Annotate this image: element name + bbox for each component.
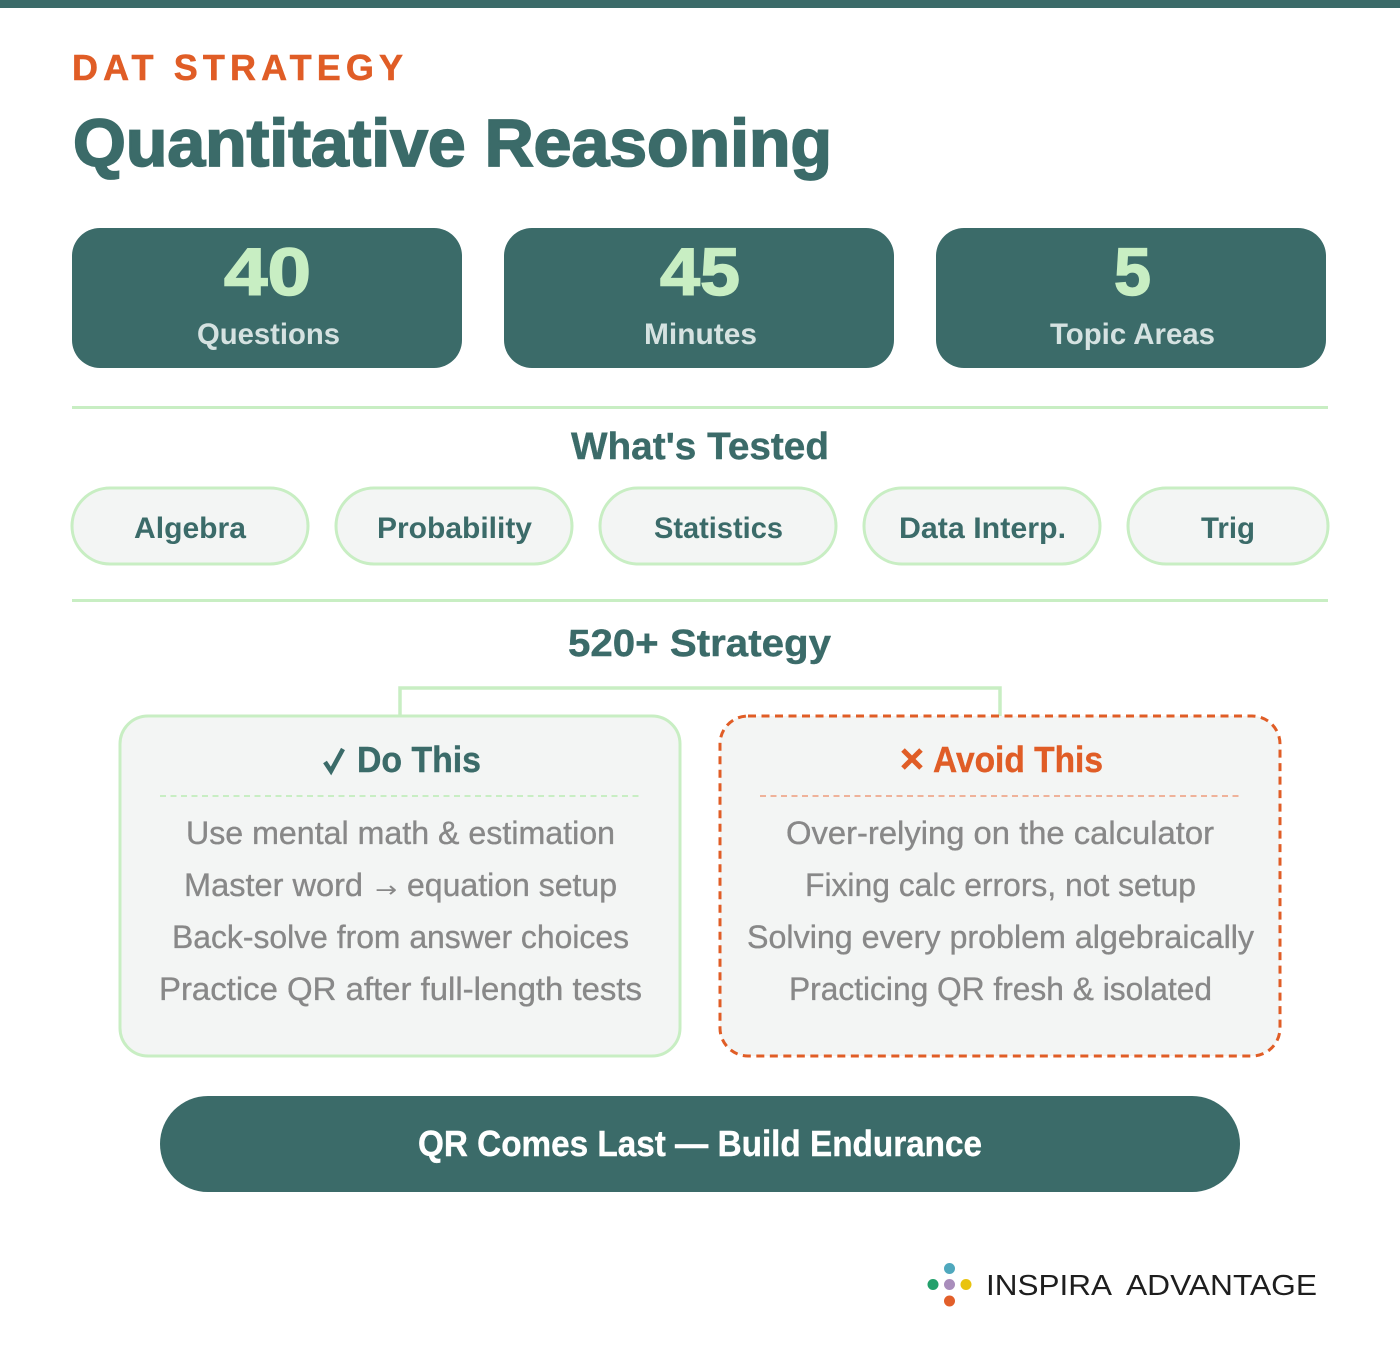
connector between strategy heading and panels: [400, 688, 1000, 716]
do this list: Practice QR after full-length tests: [159, 971, 642, 1007]
avoid this list: Fixing calc errors, not setup: [805, 867, 1196, 903]
pill: algebra: Algebra: [134, 512, 246, 545]
pill: statistics: [600, 488, 836, 564]
icon: check mark: [325, 749, 343, 771]
logo: inspira advantage: ADVANTAGE: [1126, 1270, 1317, 1302]
top accent bar: [0, 0, 1400, 8]
stat: 45 minutes: Minutes: [644, 318, 757, 351]
do this list: Master word: [184, 867, 363, 903]
stat: 40 questions: 40: [224, 235, 311, 310]
section heading: 520+ strategy: 520+ Strategy: [568, 623, 831, 665]
stat: 40 questions: Questions: [197, 318, 340, 351]
avoid this list: Practicing QR fresh & isolated: [789, 971, 1212, 1007]
avoid this list: Over-relying on the calculator: [786, 815, 1214, 851]
stat: 5 topic areas: Topic Areas: [1050, 318, 1215, 351]
do this list: →: [375, 878, 397, 903]
eyebrow heading: DAT STRATEGY: [72, 47, 403, 88]
stat cards: [72, 228, 1326, 368]
stat: 5 topic areas: 5: [1114, 235, 1151, 310]
panel: do this: [120, 716, 680, 1056]
pill: probability: Probability: [377, 512, 532, 545]
icon: logo dots: [928, 1263, 972, 1306]
icon: cross mark: [903, 750, 921, 768]
pill: algebra: [72, 488, 308, 564]
pill: probability: [336, 488, 572, 564]
do this list: Use mental math & estimation: [186, 815, 615, 851]
title: Quantitative Reasoning: [73, 106, 832, 181]
pill: trig: Trig: [1201, 512, 1255, 545]
stat: 5 topic areas: [936, 228, 1326, 368]
topic pills: [72, 488, 1328, 564]
pill: trig: [1128, 488, 1328, 564]
do this list: [159, 815, 642, 1007]
section heading: what's tested: What's Tested: [571, 426, 829, 468]
logo: inspira advantage: INSPIRA: [986, 1270, 1113, 1302]
callout banner: QR Comes Last — Build Endurance: [418, 1123, 982, 1164]
stat: 45 minutes: 45: [660, 235, 740, 310]
avoid this list: Solving every problem algebraically: [747, 919, 1254, 955]
avoid this list: [747, 815, 1254, 1007]
pill: data interp: Data Interp.: [899, 512, 1066, 545]
pill: data interp: [864, 488, 1100, 564]
panel: avoid this: [720, 716, 1280, 1056]
panel heading: do this: Do This: [357, 739, 481, 780]
do this list: equation setup: [407, 867, 617, 903]
do this list: Back-solve from answer choices: [172, 919, 629, 955]
stat: 45 minutes: [504, 228, 894, 368]
panel heading: avoid this: Avoid This: [933, 739, 1103, 780]
stat: 40 questions: [72, 228, 462, 368]
callout banner: [160, 1096, 1240, 1192]
pill: statistics: Statistics: [654, 512, 783, 545]
logo: inspira advantage: [928, 1263, 1317, 1306]
